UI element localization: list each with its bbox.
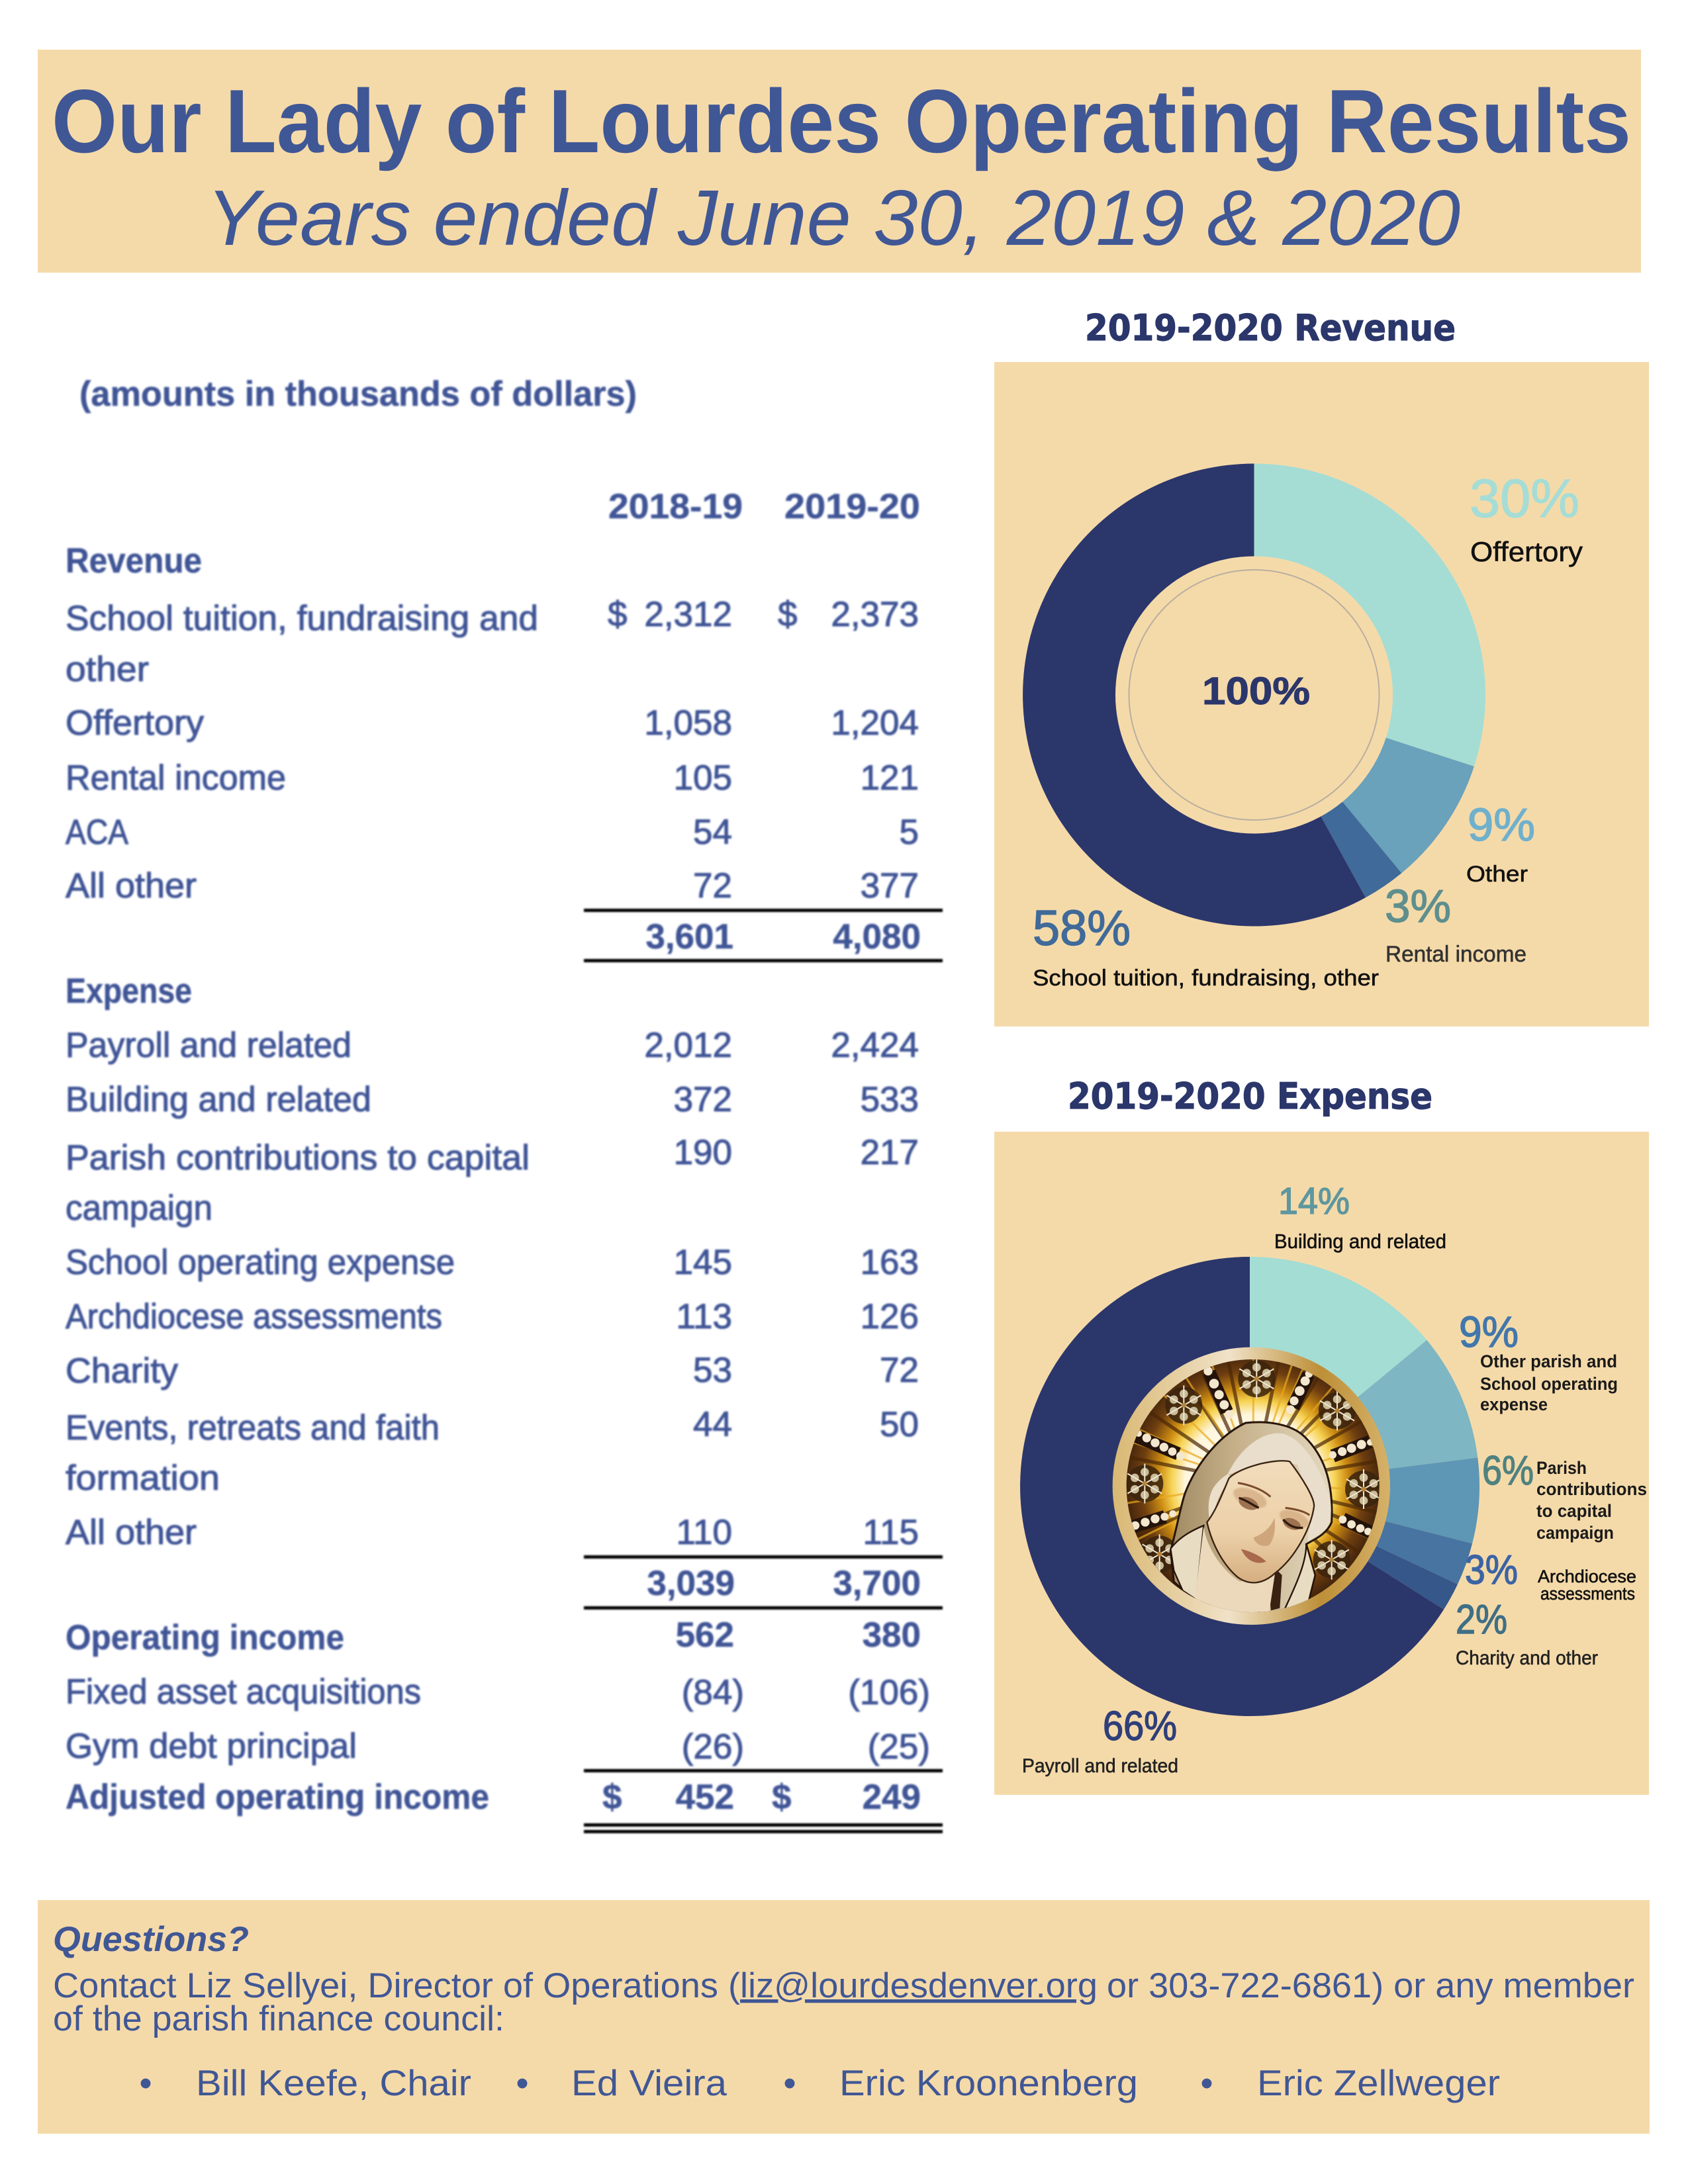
finance council members: Bill Keefe, Chair [196,2062,471,2103]
label: school tuition [1033,900,1379,991]
label: parish contributions: contributions [1536,1479,1647,1499]
row: all other expense: 110 [677,1513,732,1552]
row: all other expense: 115 [863,1513,919,1552]
label: archdiocese: 3% [1465,1547,1518,1593]
row: fixed asset acquisitions: Fixed asset acquisitions [66,1672,421,1711]
label: other: Other [1466,862,1528,887]
contact text: liz@lourdesdenver.org [740,1966,1098,2005]
row: fixed asset acquisitions: (84) [682,1673,744,1712]
row: rental income: 121 [861,758,919,797]
column headers: 2019-20 [784,487,920,526]
row: ACA [66,813,919,852]
row: archdiocese: 113 [677,1297,732,1336]
row: building: 533 [861,1080,919,1119]
label: other: 9% [1468,799,1535,850]
label: archdiocese: assessments [1540,1584,1635,1604]
label: charity: 2% [1456,1597,1507,1643]
revenue heading: 2019-2020 Revenue [1085,307,1456,349]
column headers: 2018-19 [608,487,743,526]
table note: (amounts in thousands of dollars) [79,375,637,414]
questions heading: Questions? [53,1920,249,1959]
row: building: Building and related [66,1080,371,1119]
row: parish contributions: Parish contributions to capital [66,1138,530,1177]
row: revenue total: 3,601 [645,917,733,956]
row: parish contributions [66,1133,919,1228]
center total: 100% [1202,670,1310,713]
finance council members: Eric Kroonenberg [839,2062,1138,2103]
label: other parish: 9% [1459,1307,1519,1356]
row: all other revenue [66,866,919,905]
row: school tuition: $ [778,595,797,634]
label: offertory: Offertory [1470,536,1583,567]
row: gym debt principal: (25) [868,1727,930,1766]
row: all other revenue: 377 [861,866,919,905]
label: rental income: Rental income [1385,942,1526,967]
row: adjusted operating income: 452 [676,1778,734,1817]
row: events: 50 [880,1405,919,1444]
financial table [66,375,943,1833]
label: parish contributions: Parish [1536,1458,1587,1478]
label: building [1274,1180,1446,1253]
label: building: Building and related [1274,1230,1446,1253]
label: school tuition: School tuition, fundraising, other [1033,966,1379,991]
finance council members: Eric Zellweger [1257,2062,1500,2103]
row: payroll [66,1026,919,1065]
label: parish contributions [1482,1448,1647,1543]
row: parish contributions: 190 [674,1133,732,1172]
label: archdiocese: Archdiocese [1538,1567,1636,1586]
row: offertory [66,704,919,743]
label: other parish [1459,1307,1618,1414]
row: expense total: 3,039 [647,1564,735,1603]
row: ACA: 5 [900,813,919,852]
row: charity [66,1351,919,1390]
row: adjusted operating income [66,1769,943,1833]
label: payroll: Payroll and related [1022,1755,1178,1777]
icon: portrait medallion [1113,1347,1390,1625]
row: all other revenue: 72 [693,866,732,905]
row: payroll: Payroll and related [66,1026,352,1065]
row: events [66,1405,919,1498]
panel: questions [38,1900,1650,2134]
row: rental income: 105 [674,758,732,797]
row: school tuition: $ [608,595,627,634]
row: operating income: Operating income [66,1618,344,1657]
label: charity [1456,1597,1598,1669]
row: expense total [584,1555,943,1610]
row: school tuition: School tuition, fundraising and [66,599,538,638]
row: parish contributions: 217 [861,1133,919,1172]
row: school operating: 163 [861,1243,919,1282]
label: other parish: expense [1480,1394,1548,1414]
row: ACA: 54 [693,813,732,852]
label: payroll: 66% [1103,1704,1177,1749]
label: rental income [1385,880,1526,967]
contact text: of the parish finance council: [53,1999,504,2038]
row: gym debt principal: Gym debt principal [66,1727,357,1766]
label: archdiocese [1465,1547,1636,1604]
subtitle: Years ended June 30, 2019 & 2020 [207,174,1460,262]
contact text: or 303-722-6861) or any member [1107,1966,1634,2005]
finance council members [139,2062,1500,2103]
row: offertory: Offertory [66,704,204,743]
row: events: Events, retreats and faith [66,1408,440,1447]
row: charity: Charity [66,1351,178,1390]
contact text [53,1966,1634,2038]
label: offertory [1470,469,1583,567]
label: building: 14% [1278,1180,1350,1222]
row: expense total: 3,700 [833,1564,921,1603]
title: Our Lady of Lourdes Operating Results [52,71,1631,171]
row: rental income: Rental income [66,758,286,797]
row: charity: 72 [880,1351,919,1390]
expense heading: 2019-2020 Expense [1068,1075,1432,1117]
row: archdiocese [66,1297,919,1336]
label: charity: Charity and other [1456,1647,1598,1669]
row: gym debt principal: (26) [682,1727,744,1766]
label: other parish: School operating [1480,1374,1618,1394]
donut chart: revenue [1023,463,1485,927]
row: school operating [66,1243,919,1282]
finance council members: • [1200,2062,1213,2103]
row: operating income: 562 [676,1615,734,1655]
row: building [66,1080,919,1119]
row: ACA: ACA [66,813,129,852]
label: parish contributions: campaign [1536,1523,1614,1543]
row: school tuition: 2,312 [644,595,732,634]
row: fixed asset acquisitions: (106) [848,1673,930,1712]
label: parish contributions: to capital [1536,1501,1612,1521]
row: fixed asset acquisitions [66,1672,930,1712]
row: charity: 53 [693,1351,732,1390]
row: operating income: 380 [863,1615,921,1655]
row: operating income [66,1615,921,1657]
label: rental income: 3% [1385,880,1451,932]
label: parish contributions: 6% [1482,1448,1534,1494]
row: payroll: 2,424 [831,1026,919,1065]
panel: expense [994,1132,1649,1795]
row: archdiocese: Archdiocese assessments [66,1297,442,1336]
row: offertory: 1,204 [831,704,919,743]
row: revenue total: 4,080 [833,917,921,956]
row: adjusted operating income: $ [772,1778,791,1817]
panel: revenue [994,362,1649,1026]
label: offertory: 30% [1470,469,1579,529]
finance council members: • [783,2062,796,2103]
title banner [38,50,1641,273]
finance council members: • [516,2062,529,2103]
row: building: 372 [674,1080,732,1119]
row: all other expense: All other [66,1513,197,1552]
label: school tuition: 58% [1033,900,1131,956]
row: events: formation [66,1459,220,1498]
row: parish contributions: campaign [66,1189,212,1228]
row: all other revenue: All other [66,866,197,905]
row: school operating: 145 [674,1243,732,1282]
revenue heading: Revenue [66,541,202,580]
row: adjusted operating income: Adjusted operating income [66,1778,489,1817]
finance council members: Ed Vieira [571,2062,727,2103]
donut chart: expense [1020,1257,1479,1716]
label: payroll [1022,1704,1178,1777]
contact text: Contact Liz Sellyei, Director of Operations ( [53,1966,740,2005]
row: events: 44 [693,1405,732,1444]
row: offertory: 1,058 [644,704,732,743]
row: archdiocese: 126 [861,1297,919,1336]
column headers [608,487,920,526]
row: school tuition: other [66,650,149,689]
row: school tuition [66,595,919,689]
label: other parish: Other parish and [1480,1351,1617,1371]
row: school tuition: 2,373 [831,595,919,634]
expense heading: Expense [66,972,192,1011]
row: all other expense [66,1513,919,1552]
row: adjusted operating income: $ [602,1778,622,1817]
row: gym debt principal [66,1727,930,1766]
row: adjusted operating income: 249 [863,1778,921,1817]
row: rental income [66,758,919,797]
finance council members: • [139,2062,152,2103]
row: payroll: 2,012 [644,1026,732,1065]
label: other [1466,799,1535,887]
row: school operating: School operating expense [66,1243,455,1282]
row: revenue total [584,909,943,962]
